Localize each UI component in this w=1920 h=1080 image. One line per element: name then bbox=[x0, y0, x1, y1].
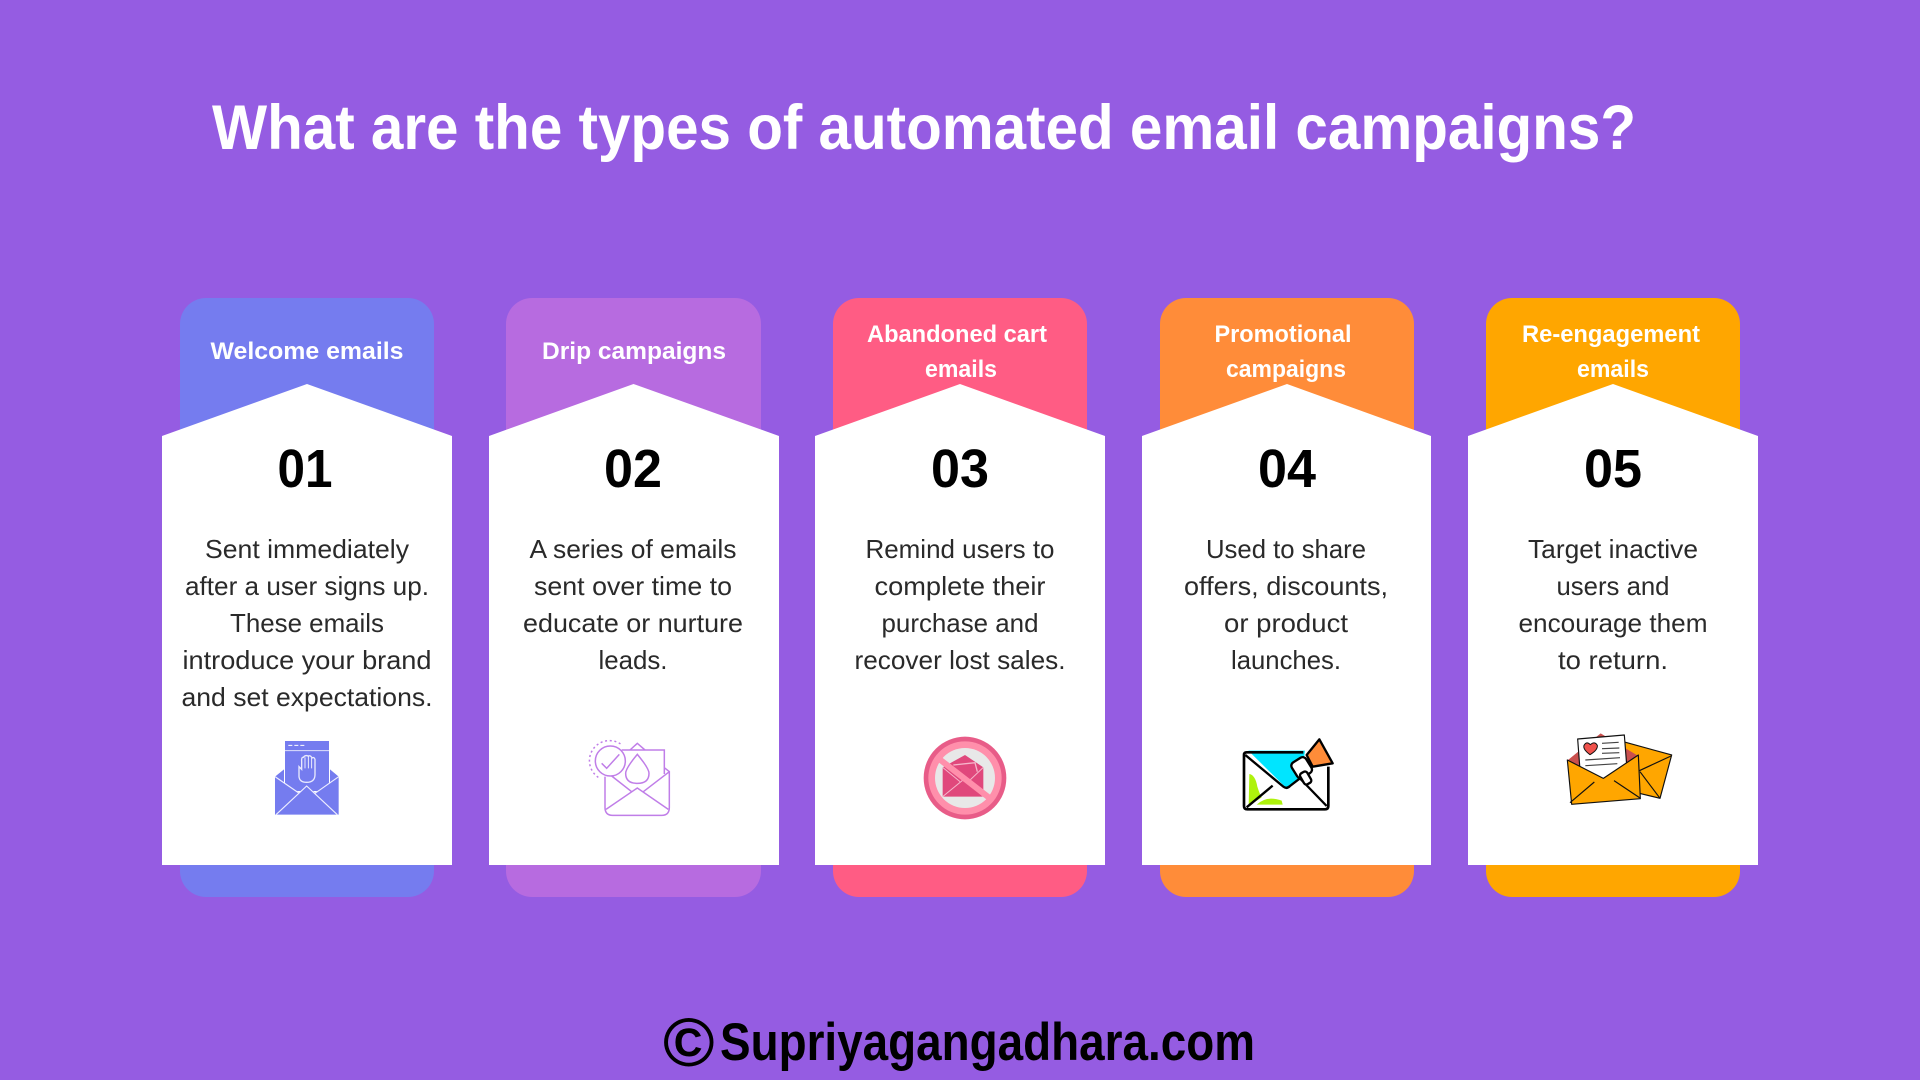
number 01: 01 bbox=[278, 439, 332, 499]
card tab: welcome bbox=[180, 298, 434, 897]
card body: welcome bbox=[162, 384, 452, 865]
panel: promotional campaigns bbox=[1142, 298, 1431, 897]
description: drip: sent over time to bbox=[534, 571, 732, 601]
heading: re-engagement emails: emails bbox=[1577, 356, 1649, 383]
footer: website credit bbox=[663, 1004, 1255, 1080]
heading: abandoned cart emails: Abandoned cart bbox=[867, 321, 1047, 348]
description: re-engagement: to return. bbox=[1558, 645, 1668, 675]
description: welcome: These emails bbox=[230, 608, 384, 638]
description: re-engagement: users and bbox=[1556, 571, 1670, 601]
number 05: 05 bbox=[1584, 439, 1642, 499]
description: re-engagement: encourage them bbox=[1518, 608, 1708, 638]
icon: copyright symbol: © bbox=[663, 1004, 715, 1080]
icon: prohibited envelope bbox=[924, 737, 1006, 819]
card body: drip bbox=[489, 384, 779, 865]
description: drip: leads. bbox=[598, 645, 668, 675]
card body: re-engagement bbox=[1468, 384, 1758, 865]
icon: envelope with megaphone bbox=[1244, 739, 1333, 809]
description: welcome: introduce your brand bbox=[182, 645, 432, 675]
number 02: 02 bbox=[604, 439, 662, 499]
description: abandoned cart: recover lost sales. bbox=[854, 645, 1066, 675]
description: re-engagement bbox=[1518, 534, 1708, 675]
description: welcome: Sent immediately bbox=[205, 534, 409, 564]
number 03: 03 bbox=[931, 439, 989, 499]
heading: re-engagement emails bbox=[1522, 321, 1700, 383]
card tab: drip bbox=[506, 298, 761, 897]
title: What are the types of automated email campaigns? bbox=[212, 93, 1636, 163]
card tab: abandoned cart bbox=[833, 298, 1087, 897]
description: drip bbox=[523, 534, 743, 675]
description: welcome: and set expectations. bbox=[182, 682, 432, 712]
description: promotional: Used to share bbox=[1206, 534, 1366, 564]
description: drip: A series of emails bbox=[530, 534, 736, 564]
description: re-engagement: Target inactive bbox=[1528, 534, 1698, 564]
icon: envelope with hand bbox=[275, 741, 339, 815]
icon: envelope with check and drop bbox=[589, 741, 669, 815]
number 04: 04 bbox=[1258, 439, 1316, 499]
heading: promotional campaigns bbox=[1214, 321, 1352, 383]
card tab: re-engagement bbox=[1486, 298, 1740, 897]
description: drip: educate or nurture bbox=[523, 608, 743, 638]
heading: welcome emails: Welcome emails bbox=[210, 338, 404, 365]
description: abandoned cart: purchase and bbox=[882, 608, 1038, 638]
panel: re-engagement emails bbox=[1468, 298, 1758, 897]
description: promotional bbox=[1184, 534, 1388, 675]
description: promotional: launches. bbox=[1231, 645, 1341, 675]
description: welcome bbox=[182, 534, 432, 712]
card body: abandoned cart bbox=[815, 384, 1105, 865]
heading: abandoned cart emails: emails bbox=[925, 356, 997, 383]
card tab: promotional bbox=[1160, 298, 1414, 897]
website name: Supriyagangadhara.com bbox=[720, 1013, 1255, 1072]
heading: abandoned cart emails bbox=[867, 321, 1047, 383]
description: abandoned cart bbox=[854, 534, 1066, 675]
panel: abandoned cart emails bbox=[815, 298, 1105, 897]
icon: love letter envelopes bbox=[1567, 733, 1672, 804]
description: abandoned cart: Remind users to bbox=[866, 534, 1054, 564]
panel: drip campaigns bbox=[489, 298, 779, 897]
description: abandoned cart: complete their bbox=[874, 571, 1046, 601]
heading: re-engagement emails: Re-engagement bbox=[1522, 321, 1700, 348]
panel: welcome emails bbox=[162, 298, 452, 897]
card body: promotional bbox=[1142, 384, 1431, 865]
heading: promotional campaigns: campaigns bbox=[1226, 356, 1346, 383]
heading: promotional campaigns: Promotional bbox=[1214, 321, 1352, 348]
description: promotional: offers, discounts, bbox=[1184, 571, 1388, 601]
heading: drip campaigns: Drip campaigns bbox=[542, 338, 726, 365]
description: welcome: after a user signs up. bbox=[185, 571, 429, 601]
description: promotional: or product bbox=[1224, 608, 1349, 638]
